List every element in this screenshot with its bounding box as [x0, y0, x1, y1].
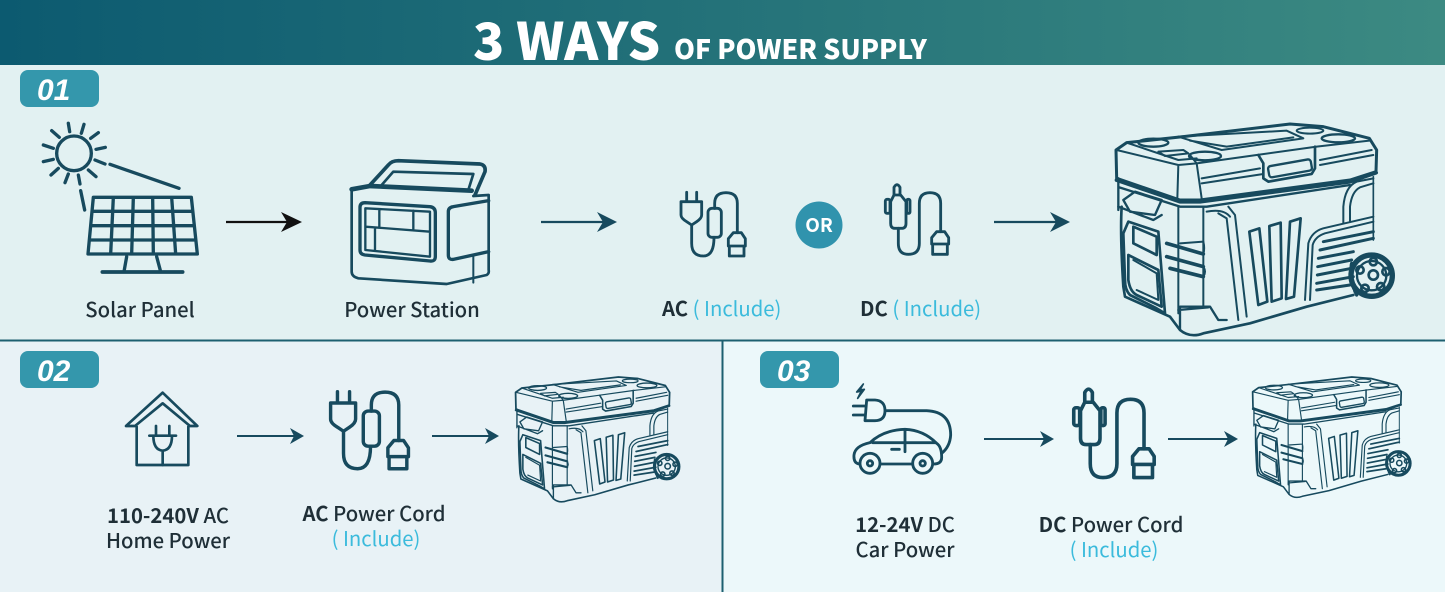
- icon: DC cord: [885, 185, 949, 254]
- badge 01: [20, 70, 99, 107]
- arrow: [984, 431, 1054, 447]
- title: OF POWER SUPPLY: [674, 28, 928, 67]
- arrow: [994, 212, 1070, 232]
- label: car power: Car Power: [855, 533, 955, 563]
- label: DC power cord: DC Power Cord: [1039, 508, 1183, 538]
- icon: cooler: [1253, 377, 1410, 497]
- icon: house: [126, 393, 197, 465]
- icon: cooler: [516, 377, 679, 502]
- label: home power: Home Power: [106, 524, 231, 554]
- label: AC power cord: ( Include): [332, 522, 420, 552]
- badge 03: [760, 351, 839, 388]
- icon: power station: [352, 161, 489, 284]
- icon: AC cord: [331, 392, 408, 469]
- arrow: [1168, 431, 1238, 447]
- label: home power: 110-240V AC: [107, 499, 229, 529]
- arrow: [237, 428, 304, 444]
- OR badge: OR: [805, 211, 833, 238]
- arrow: [226, 212, 302, 232]
- label: AC include: AC ( Include): [661, 292, 781, 322]
- label: car power: 12-24V DC: [855, 508, 955, 538]
- OR badge: [796, 202, 842, 248]
- icon: solar panel: [43, 123, 197, 272]
- badge 02: 02: [37, 355, 71, 388]
- label: AC power cord: AC Power Cord: [302, 497, 446, 527]
- icon: car with plug: [853, 384, 951, 473]
- header banner: [0, 0, 1445, 75]
- icon: DC cord: [1074, 389, 1154, 478]
- label: solar panel: Solar Panel: [85, 293, 195, 323]
- arrow: [432, 428, 499, 444]
- arrow: [541, 212, 617, 232]
- title: 3 WAYS: [473, 0, 660, 75]
- badge 02: [20, 351, 99, 388]
- icon: large cooler: [1116, 124, 1392, 335]
- panel: way 02 home: [20, 351, 679, 554]
- panel: way 03 car: [760, 351, 1410, 563]
- badge 01: 01: [37, 74, 70, 107]
- label: DC power cord: ( Include): [1070, 533, 1158, 563]
- icon: AC cord: [681, 192, 745, 256]
- label: DC include: DC ( Include): [860, 292, 981, 322]
- panel: way 01 solar: [20, 70, 1392, 335]
- badge 03: 03: [777, 355, 811, 388]
- label: power station: Power Station: [344, 293, 480, 323]
